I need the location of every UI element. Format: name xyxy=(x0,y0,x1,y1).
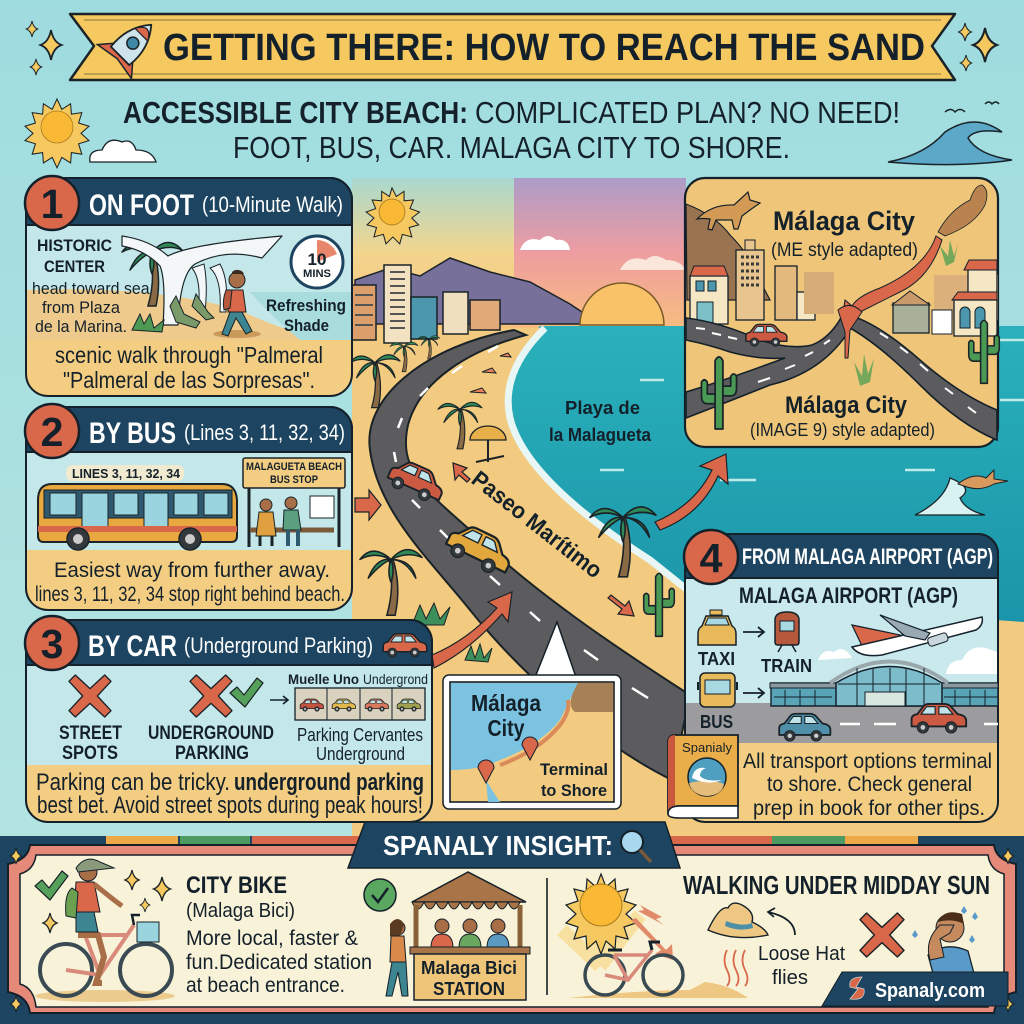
Paseo Maritimo label: Paseo Marítimo xyxy=(467,465,607,583)
text: underground parking: UNDERGROUND xyxy=(148,723,274,744)
inset map: terminal to shore: City xyxy=(488,715,525,741)
illustration: walking person xyxy=(213,270,261,338)
panel: by bus xyxy=(25,404,352,610)
heading: ON FOOT xyxy=(89,189,194,222)
cars xyxy=(779,704,966,741)
icon: bus xyxy=(698,673,737,707)
inset map: terminal to shore: Málaga xyxy=(471,690,541,716)
icon: car xyxy=(383,634,427,657)
text: underground parking: PARKING xyxy=(175,743,249,764)
panel: on foot xyxy=(25,176,352,396)
text: historic center: from Plaza xyxy=(42,298,121,317)
text: malaga city top: (ME style adapted) xyxy=(771,240,918,261)
inset map: terminal to shore: Terminal xyxy=(540,760,608,779)
hill and fox xyxy=(686,192,770,300)
icon: 10 mins timer: 10 xyxy=(308,250,326,269)
icon: red cross xyxy=(860,913,904,957)
arrow xyxy=(270,696,288,704)
text: street spots: SPOTS xyxy=(62,743,118,764)
illustration: cyclist xyxy=(35,859,175,1002)
arrow from bus panel xyxy=(355,490,381,520)
illustration: bus stop: MALAGUETA BEACH xyxy=(246,461,342,473)
text: street spots: STREET xyxy=(59,723,122,744)
icon: sun top left xyxy=(25,99,89,168)
beach umbrella and lounger xyxy=(470,353,511,462)
badge: spanaly.com xyxy=(822,972,1008,1006)
number badge 4: 4 xyxy=(700,535,723,581)
illustration: bus: LINES 3, 11, 32, 34 xyxy=(72,466,181,481)
text: historic center: head toward sea. xyxy=(32,279,154,298)
text: city bike xyxy=(186,872,372,997)
text: city bike: at beach entrance. xyxy=(186,974,345,997)
heading: (Lines 3, 11, 32, 34) xyxy=(184,420,345,445)
text: parking cervantes: Parking Cervantes xyxy=(297,725,423,745)
subtitle: FOOT, BUS, CAR. MALAGA CITY TO SHORE. xyxy=(233,130,790,165)
icon: wave and birds xyxy=(888,102,1012,165)
palm trees xyxy=(350,336,656,615)
clouds xyxy=(818,647,997,674)
subtitle xyxy=(123,95,900,165)
text: bus: BUS xyxy=(700,712,733,732)
check xyxy=(35,871,68,900)
insight frame xyxy=(8,845,1016,1013)
text: city bike: fun.Dedicated station xyxy=(186,951,372,974)
text: underground parking xyxy=(148,723,274,764)
icon: book xyxy=(668,735,738,818)
panel: from airport xyxy=(668,530,998,822)
text: muelle uno: Undergrond xyxy=(363,671,428,687)
cactus and plants xyxy=(701,240,999,429)
cactus and shrubs xyxy=(412,573,674,662)
text: historic center: de la Marina. xyxy=(35,317,127,336)
text: parking advice: best bet. Avoid street spots during peak hours! xyxy=(37,792,423,819)
panel: by car xyxy=(25,616,432,822)
icon: underground cross and check xyxy=(190,675,263,717)
icon: train xyxy=(775,612,799,652)
icon: book: Spanialy xyxy=(682,740,732,755)
divider xyxy=(546,878,548,995)
heading: (10-Minute Walk) xyxy=(202,192,343,217)
decorative stars xyxy=(26,21,997,75)
icon: green check circle xyxy=(364,879,396,911)
icon: hat with arrow xyxy=(708,903,795,938)
text: airport summary: to shore. Check general xyxy=(767,773,972,796)
illustration: terminal xyxy=(770,662,998,706)
heading xyxy=(89,417,345,450)
number badge 4 xyxy=(684,530,738,584)
inset map: terminal to shore: to Shore xyxy=(541,781,607,800)
parking bays xyxy=(295,688,425,720)
text: parking advice: Parking can be tricky. xyxy=(36,769,230,796)
ribbon heading xyxy=(348,822,680,868)
subheading: MALAGA AIRPORT (AGP) xyxy=(739,583,958,608)
number badge 3 xyxy=(25,616,79,670)
illustration: bike on dune xyxy=(568,942,748,998)
icon: 10 mins timer: MINS xyxy=(303,268,331,280)
text: muelle uno xyxy=(288,671,428,687)
curved arrow to map xyxy=(655,454,728,530)
subtitle: COMPLICATED PLAN? NO NEED! xyxy=(475,95,900,130)
text: city bike: CITY BIKE xyxy=(186,872,287,899)
text: loose hat flies: Loose Hat xyxy=(758,943,845,965)
text: scenic walk: scenic walk through "Palmeral xyxy=(55,342,323,368)
small car xyxy=(746,324,787,346)
number badge 1: 1 xyxy=(41,181,63,227)
text: malaga city top xyxy=(771,206,918,261)
illustration: palmeral canopy xyxy=(122,236,282,332)
arrow xyxy=(743,627,764,637)
illustration: bus stop xyxy=(243,458,345,547)
text: scenic walk: "Palmeral de las Sorpresas". xyxy=(63,367,315,393)
arrow xyxy=(743,688,764,698)
badge: spanaly.com: Spanaly.com xyxy=(875,980,985,1002)
peninsula and arrow xyxy=(838,185,987,358)
text: taxi: TAXI xyxy=(698,649,735,669)
text: scenic walk xyxy=(55,342,323,393)
road markings xyxy=(840,723,998,725)
panel: malaga city map xyxy=(685,178,999,447)
city buildings xyxy=(352,265,500,343)
curved arrow from car panel xyxy=(432,592,512,668)
illustration: bici station xyxy=(410,872,530,1000)
heat lines xyxy=(724,950,748,986)
text: airport summary: All transport options terminal xyxy=(743,750,992,773)
illustration: hot man xyxy=(912,906,978,999)
icon: airplane xyxy=(852,615,982,656)
illustration: woman at station xyxy=(386,919,408,996)
text: train: TRAIN xyxy=(761,656,812,676)
central beach scene xyxy=(350,178,1024,838)
icon: street spots cross xyxy=(69,675,111,717)
insight band xyxy=(0,822,1024,1024)
heading xyxy=(88,630,373,663)
text: malaga city top: Málaga City xyxy=(773,206,915,236)
text: refreshing shade xyxy=(266,296,346,335)
city buildings left xyxy=(690,240,834,324)
text: parking cervantes: Underground xyxy=(316,744,405,764)
subtitle: ACCESSIBLE CITY BEACH: xyxy=(123,95,468,130)
ribbon heading: SPANALY INSIGHT: xyxy=(383,830,613,861)
text: parking cervantes xyxy=(297,725,423,764)
text: muelle uno: Muelle Uno xyxy=(288,671,359,687)
text: parking advice: underground parking xyxy=(234,769,424,796)
Playa de la Malagueta label xyxy=(549,398,652,445)
text: city bike: More local, faster & xyxy=(186,927,358,950)
number badge 2 xyxy=(25,404,79,458)
text: refreshing shade: Refreshing xyxy=(266,296,346,315)
text: parking advice xyxy=(36,769,424,819)
number badge 1 xyxy=(25,176,79,230)
icon: taxi xyxy=(698,610,736,645)
Playa de la Malagueta label: la Malagueta xyxy=(549,425,652,445)
city buildings right xyxy=(892,260,998,336)
illustration: bus stop: BUS STOP xyxy=(270,474,318,486)
roads xyxy=(686,316,997,440)
number badge 3: 3 xyxy=(41,621,63,667)
heading xyxy=(89,189,343,222)
Playa de la Malagueta label: Playa de xyxy=(565,398,640,418)
icon: cloud xyxy=(90,140,156,162)
text: city bike: (Malaga Bici) xyxy=(186,900,295,922)
text: malaga city bottom: Málaga City xyxy=(785,392,908,419)
text: malaga city bottom xyxy=(750,392,935,440)
icon: rocket xyxy=(97,8,168,79)
sparkle stars xyxy=(43,870,170,933)
cars on road xyxy=(385,456,517,580)
illustration: bici station: STATION xyxy=(433,979,505,999)
text: malaga city bottom: (IMAGE 9) style adapted) xyxy=(750,420,935,440)
number badge 2: 2 xyxy=(41,409,63,455)
heading: BY BUS xyxy=(89,417,176,450)
text: bus description: lines 3, 11, 32, 34 stop right behind beach. xyxy=(35,583,345,606)
inset map: terminal to shore xyxy=(443,622,621,809)
text: historic center: CENTER xyxy=(44,257,105,276)
text: refreshing shade: Shade xyxy=(284,316,329,335)
text: loose hat flies: flies xyxy=(772,967,808,989)
illustration: bus xyxy=(38,465,237,550)
corner stars xyxy=(10,848,1014,1012)
text: historic center xyxy=(32,236,154,336)
text: airport summary xyxy=(743,750,992,820)
icon: 10 mins timer xyxy=(291,236,343,288)
text: bus description xyxy=(35,559,345,606)
text: airport summary: prep in book for other tips. xyxy=(753,797,985,820)
title text: GETTING THERE: HOW TO REACH THE SAND xyxy=(163,27,925,69)
title banner xyxy=(70,8,955,80)
text: bus description: Easiest way from further away. xyxy=(54,559,330,582)
wave and dolphin xyxy=(915,470,1008,515)
text: historic center: HISTORIC xyxy=(37,236,112,255)
illustration: sun with rays xyxy=(562,874,673,966)
sun in sky xyxy=(366,188,420,244)
heading: (Underground Parking) xyxy=(184,633,373,658)
promenade arrows xyxy=(453,463,634,616)
text: loose hat flies xyxy=(758,943,845,989)
heading: BY CAR xyxy=(88,630,177,663)
text: street spots xyxy=(59,723,122,764)
illustration: bici station: Malaga Bici xyxy=(421,958,517,978)
